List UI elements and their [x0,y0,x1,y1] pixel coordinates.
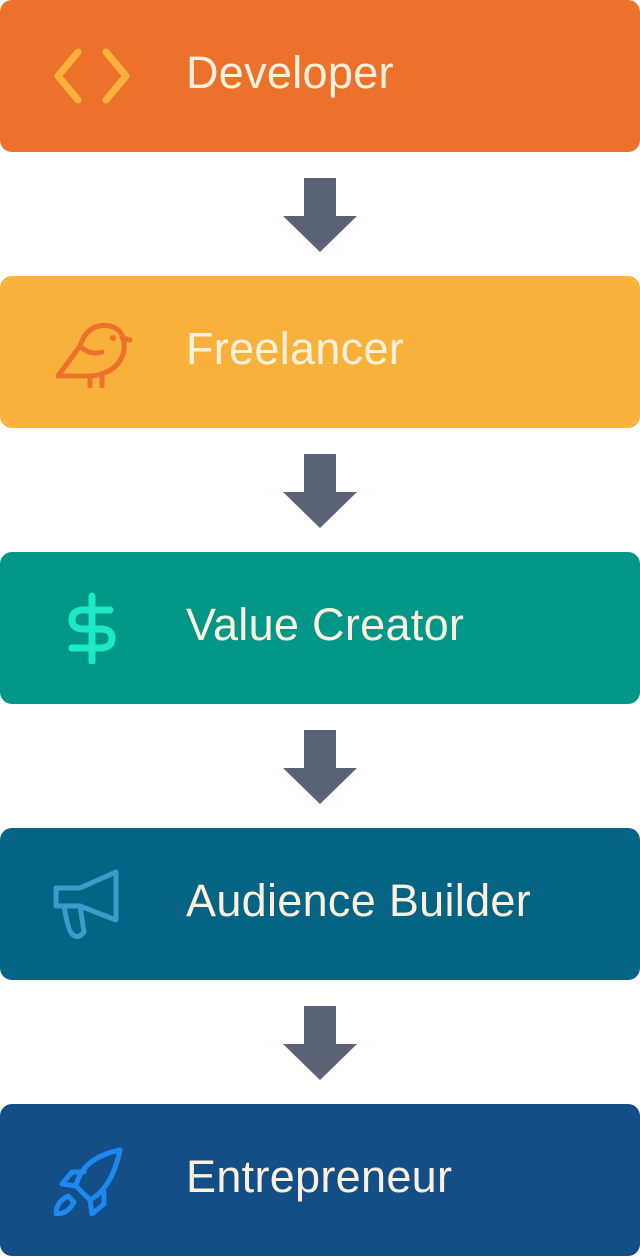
label: Value Creator [186,599,464,650]
panel: Value Creator [0,552,640,704]
label: Developer [186,47,394,98]
arrow 2 [283,454,357,528]
arrow 4 [283,1006,357,1080]
icon: bird [56,322,132,388]
arrow 3 [283,730,357,804]
arrow 1 [283,178,357,252]
panel: Entrepreneur [0,1104,640,1256]
icon: rocket [54,1148,122,1216]
icon: megaphone [54,870,118,940]
icon: code brackets [54,48,130,104]
icon: dollar [68,592,116,664]
panel: Audience Builder [0,828,640,980]
panel: Developer [0,0,640,152]
label: Freelancer [186,323,404,374]
label: Audience Builder [186,875,531,926]
panel: Freelancer [0,276,640,428]
label: Entrepreneur [186,1151,452,1202]
